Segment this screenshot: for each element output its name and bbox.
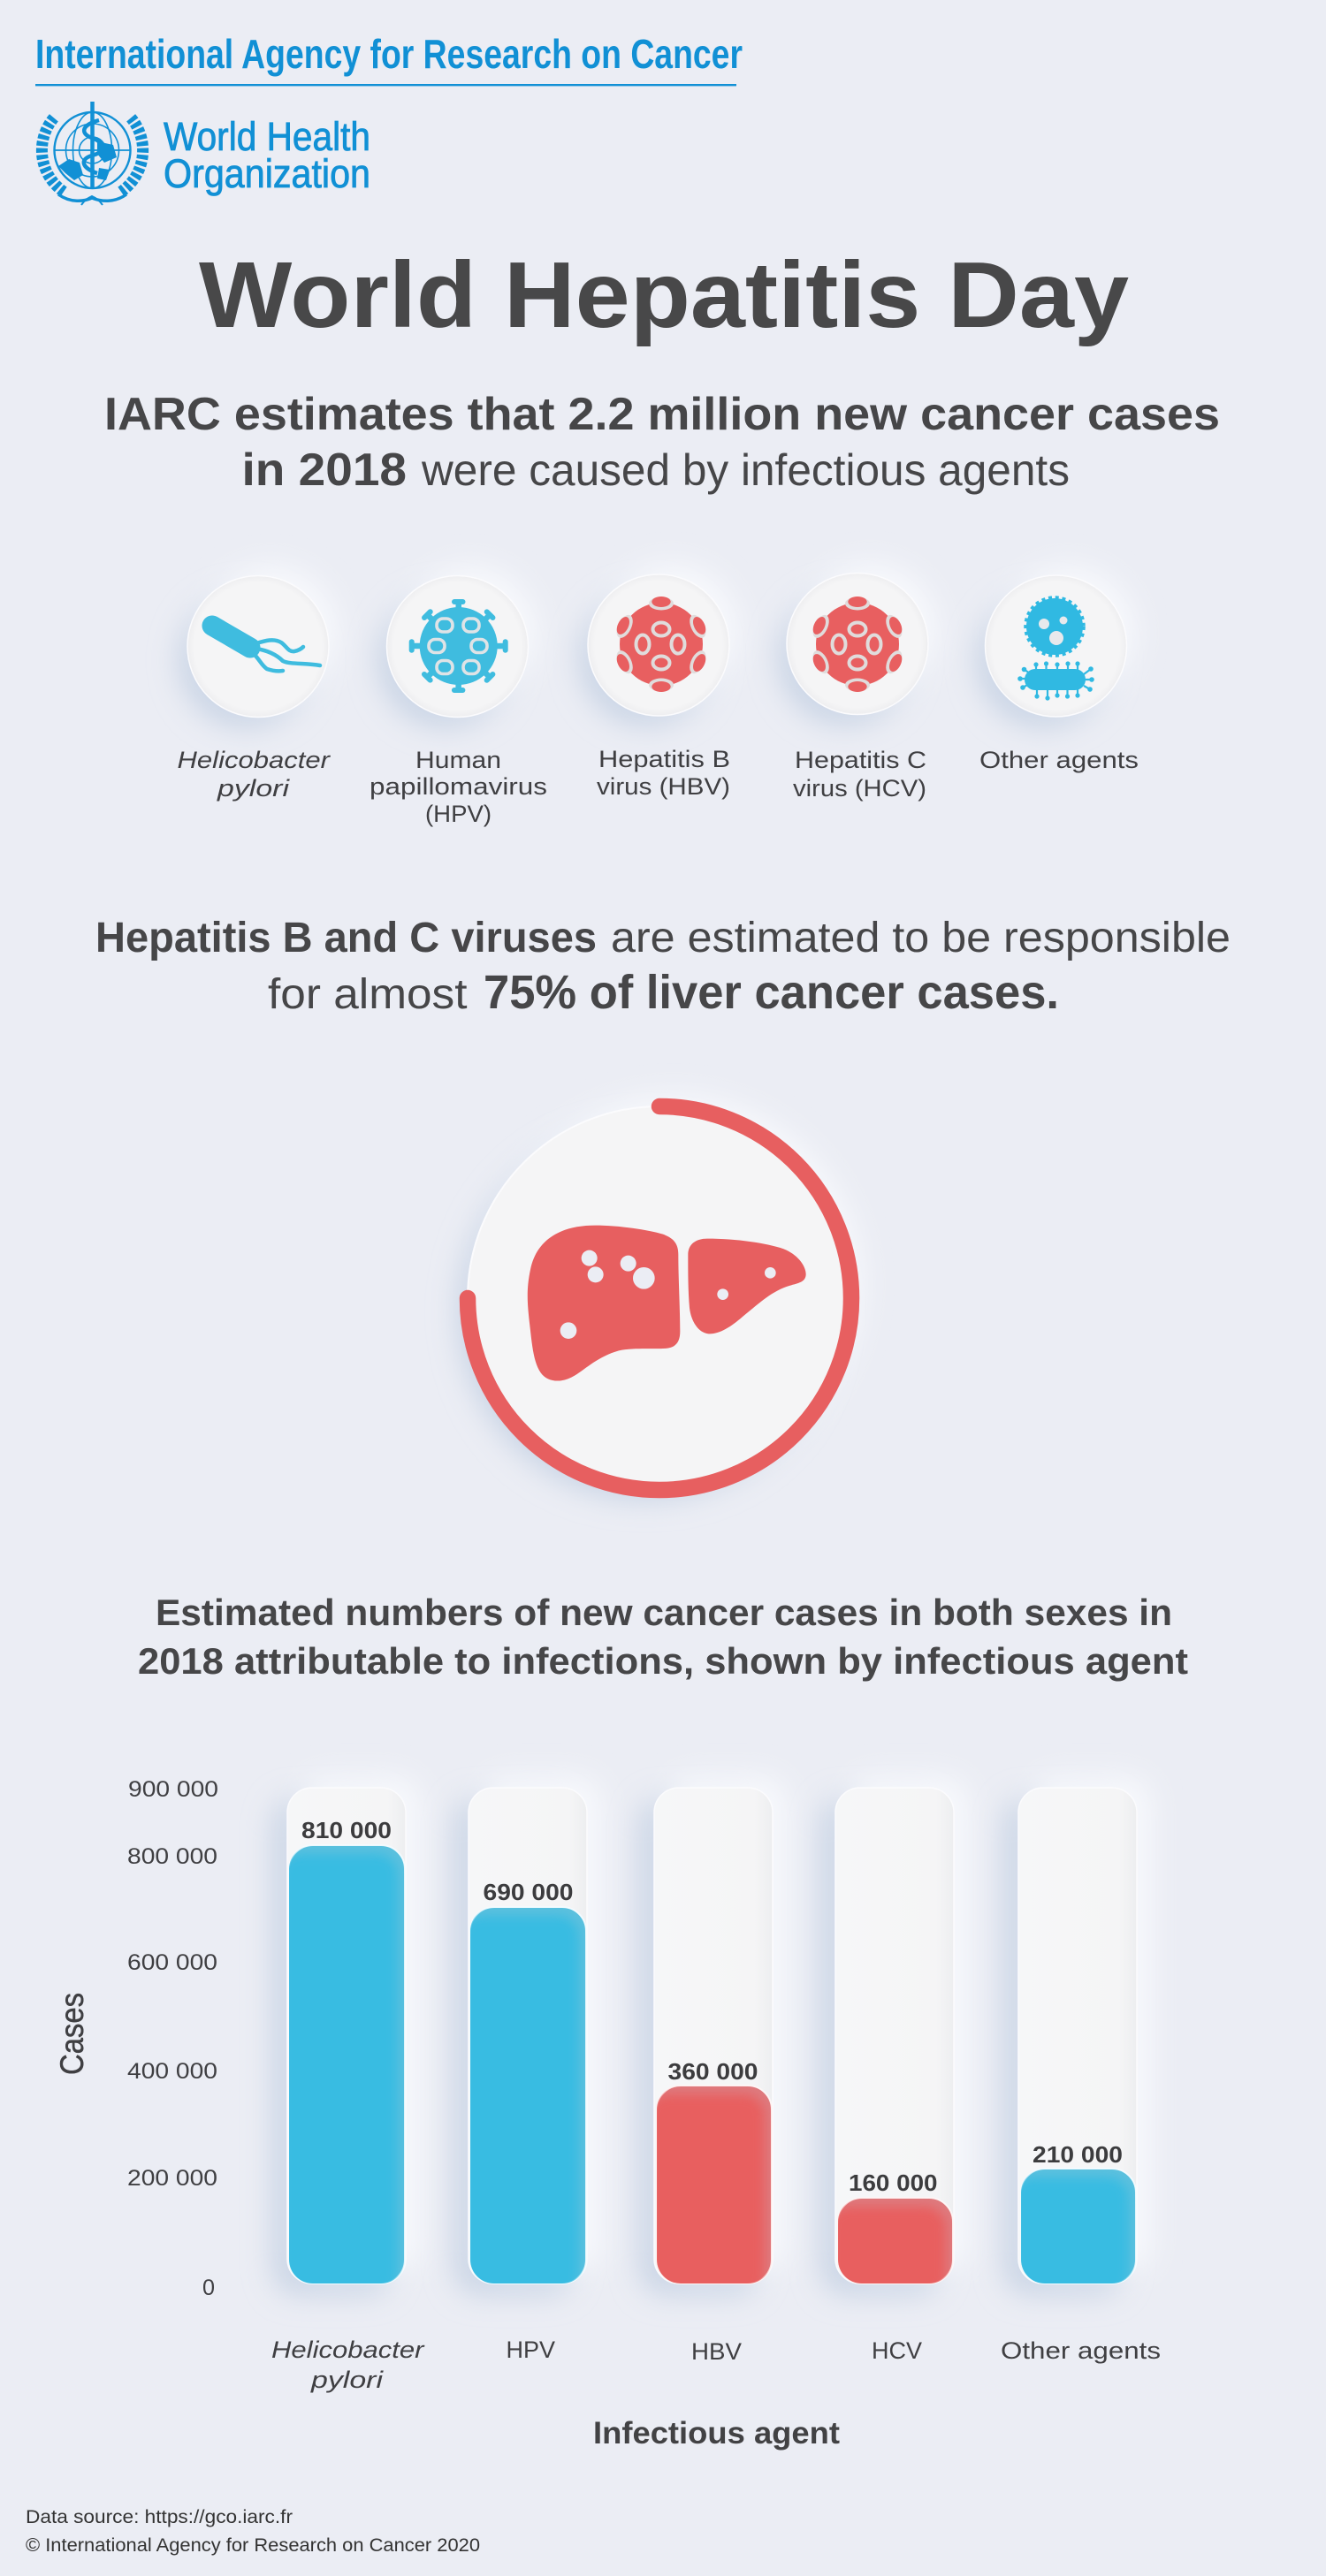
bar: Other agents 210 000: 210 000	[1033, 2141, 1123, 2168]
icon: HCV virus	[810, 597, 905, 692]
icon: liver with lesions	[528, 1226, 806, 1381]
panel: liver gauge 75%	[458, 1097, 861, 1500]
panel: Hepatitis C virus	[778, 564, 937, 802]
footer: source and copyright: © International Agency for Research on Cancer 2020	[26, 2535, 480, 2556]
header: IARC name: International Agency for Research on Cancer	[35, 31, 743, 77]
bar chart	[54, 1777, 1161, 2451]
statement: liver cancer share	[95, 915, 1231, 1019]
statement: liver cancer share: are estimated to be responsible	[611, 915, 1231, 961]
logo: World Health Organization: World Health	[164, 114, 370, 159]
bar: Helicobacter pylori 810 000	[273, 1777, 420, 2296]
title: World Hepatitis Day	[199, 243, 1129, 347]
x axis labels: Helicobacter	[271, 2337, 425, 2363]
x axis labels	[271, 2337, 1161, 2393]
label: virus (HBV)	[597, 773, 730, 800]
bar: HPV 690 000: 690 000	[483, 1879, 573, 1905]
icon: HBV virus	[613, 597, 709, 692]
y axis labels: 400 000	[127, 2059, 217, 2084]
footer: source and copyright	[26, 2507, 480, 2556]
statement: liver cancer share: 75% of liver cancer cases.	[484, 966, 1059, 1019]
bar: HBV 360 000	[640, 1777, 787, 2296]
icon: round virus and bacterium	[1017, 597, 1094, 701]
footer: source and copyright: Data source: https://gco.iarc.fr	[26, 2507, 293, 2527]
label: pylori	[217, 775, 290, 802]
y axis labels	[127, 1777, 218, 2300]
icon: bacterium	[212, 626, 320, 671]
statement: liver cancer share: Hepatitis B and C viruses	[95, 915, 597, 961]
y axis title: Cases	[54, 1993, 90, 2075]
label: Human	[415, 747, 501, 773]
panel: Human papillomavirus	[370, 566, 547, 827]
label: Helicobacter	[177, 747, 331, 773]
chart heading: 2018 attributable to infections, shown by infectious agent	[138, 1640, 1188, 1682]
panel: Hepatitis B virus	[579, 565, 738, 800]
bar: HBV 360 000: 360 000	[668, 2058, 758, 2085]
label: papillomavirus	[370, 773, 547, 800]
bar: HCV 160 000	[821, 1777, 968, 2296]
bar: Helicobacter pylori 810 000: 810 000	[301, 1817, 392, 1843]
x axis labels: HBV	[691, 2338, 742, 2365]
bar: HPV 690 000	[454, 1777, 601, 2296]
x axis labels: pylori	[310, 2367, 384, 2393]
x axis labels: HCV	[872, 2337, 922, 2364]
subtitle	[104, 389, 1220, 496]
subtitle: were caused by infectious agents	[421, 445, 1070, 495]
y axis labels: 0	[202, 2276, 215, 2300]
y axis labels: 800 000	[127, 1844, 217, 1869]
label: (HPV)	[425, 801, 492, 827]
statement: liver cancer share: for almost	[268, 971, 467, 1018]
y axis labels: 200 000	[127, 2166, 217, 2191]
bar: HCV 160 000: 160 000	[849, 2169, 937, 2196]
logo: World Health Organization: Organization	[164, 151, 370, 196]
label: Hepatitis C	[795, 747, 926, 773]
panel: Helicobacter pylori	[177, 566, 338, 802]
x axis labels: Other agents	[1001, 2337, 1161, 2364]
chart heading	[138, 1592, 1188, 1682]
logo: World Health Organization	[42, 102, 370, 205]
x axis title: Infectious agent	[593, 2416, 840, 2451]
label: virus (HCV)	[793, 775, 926, 802]
y axis labels: 600 000	[127, 1950, 217, 1975]
label	[370, 747, 547, 827]
panel: Other agents	[976, 566, 1139, 773]
icon: HPV virus	[409, 599, 508, 693]
label	[177, 747, 331, 802]
ring: 75 percent arc	[468, 1106, 851, 1490]
subtitle: IARC estimates that 2.2 million new cancer cases	[104, 389, 1220, 440]
chart heading: Estimated numbers of new cancer cases in both sexes in	[156, 1592, 1172, 1633]
label	[793, 747, 926, 802]
bar: Other agents 210 000	[1004, 1777, 1151, 2296]
y axis labels: 900 000	[128, 1777, 218, 1802]
label: Other agents	[979, 747, 1139, 773]
x axis labels: HPV	[506, 2337, 555, 2363]
icon: WHO emblem	[42, 102, 143, 205]
subtitle: in 2018	[242, 445, 407, 496]
label: Hepatitis B	[598, 746, 730, 772]
label	[597, 746, 730, 800]
